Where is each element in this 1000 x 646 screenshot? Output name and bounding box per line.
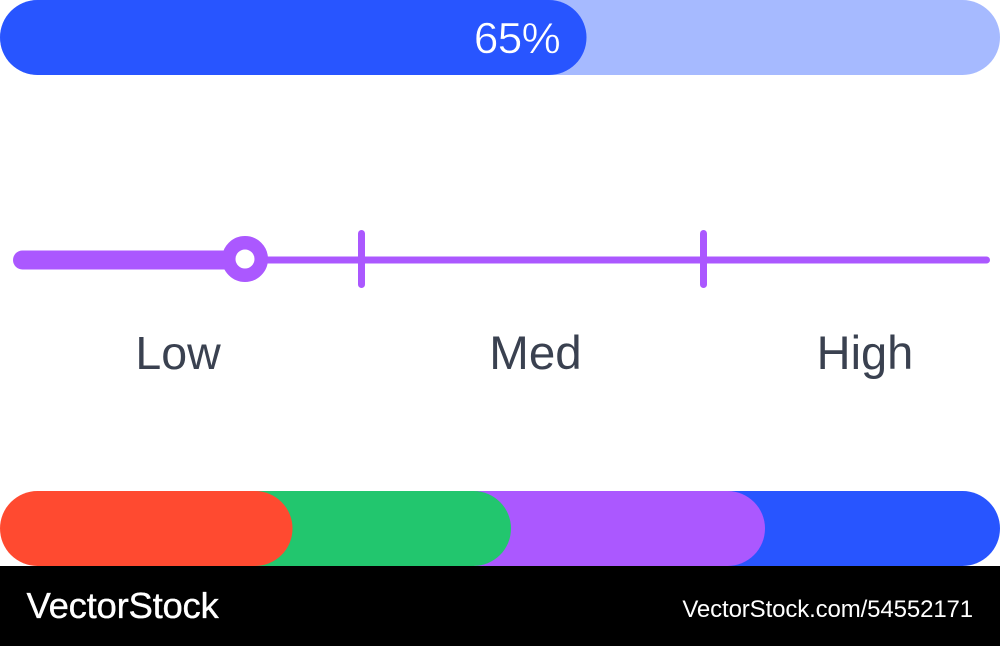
tick: med to high: [700, 230, 707, 288]
segment: purple: [440, 491, 765, 566]
progress track: [0, 0, 1000, 75]
slider thick track: [13, 250, 243, 270]
label: High: High: [817, 326, 913, 379]
label: Med: Med: [489, 327, 582, 380]
slider handle: [229, 243, 261, 275]
slider: low, med, high: [13, 230, 990, 380]
progress bar: 65%: [0, 0, 1000, 75]
segment: blue: [690, 491, 1000, 566]
tick: low to med: [358, 230, 365, 288]
segmented stacked bar: [0, 491, 1000, 566]
footer background: [0, 566, 1000, 646]
slider thin track: [240, 256, 990, 264]
segment: green: [220, 491, 511, 566]
watermark image id: VectorStock.com/54552171: [682, 596, 973, 623]
progress fill: [0, 0, 586, 75]
watermark brand: VectorStock: [26, 585, 220, 626]
watermark footer bar: [0, 566, 1000, 646]
label: Low: Low: [135, 327, 221, 379]
progress value: 65%: [474, 14, 560, 63]
segment: red: [0, 491, 292, 566]
